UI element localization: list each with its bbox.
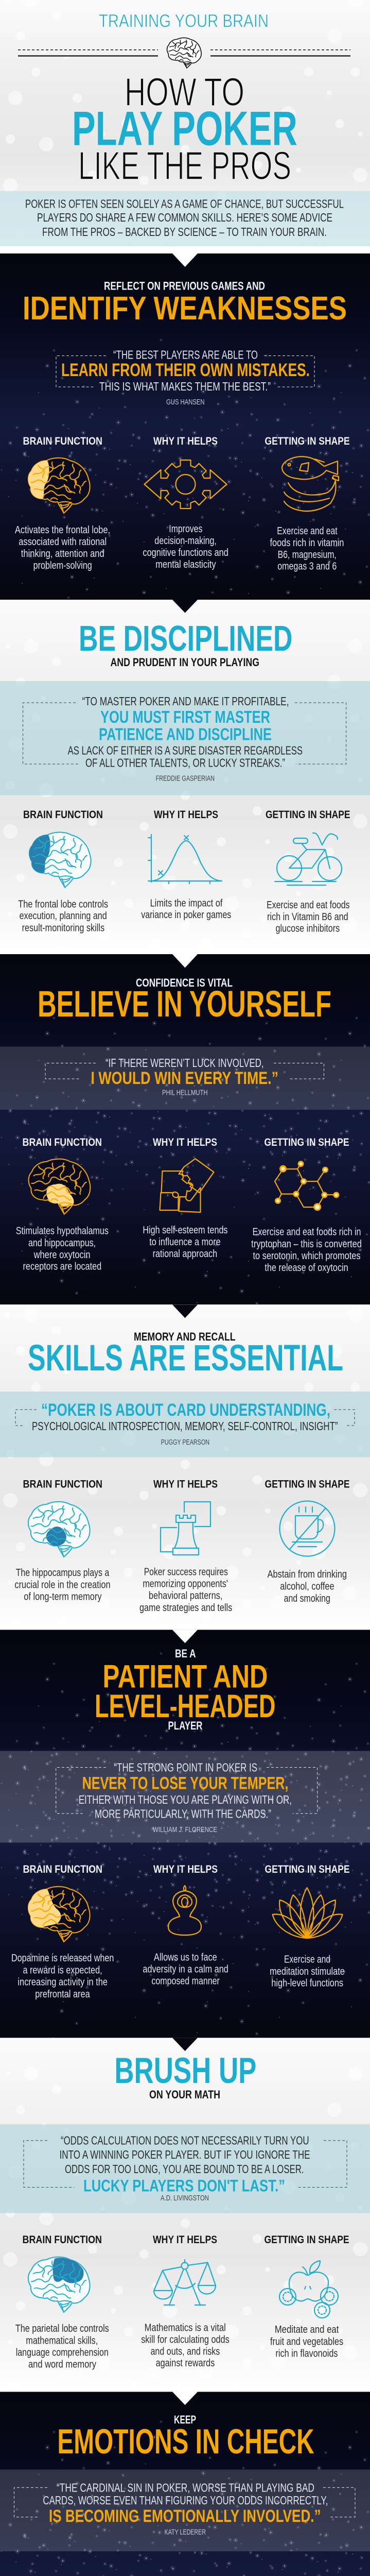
text block: high-level functions (271, 1977, 343, 1989)
heading: REFLECT ON PREVIOUS GAMES AND (104, 280, 265, 293)
quote (23, 694, 346, 783)
panel: patient and level-headed (0, 1630, 370, 2048)
text block: and word memory (28, 2359, 96, 2370)
icon: brain limbic region (29, 1159, 90, 1214)
panel: skills are essential (0, 1304, 370, 1630)
column: brain function (14, 1478, 111, 1602)
text block: execution, planning and (20, 910, 107, 922)
text block: increasing activity in the (17, 1976, 108, 1988)
icon: lotus (273, 1888, 343, 1938)
icon: molecule (275, 1161, 339, 1211)
column: why it helps (141, 808, 231, 921)
column: brain function (11, 1863, 114, 2000)
heading: BRUSH UP (114, 2050, 256, 2091)
text block: Improves (169, 523, 202, 535)
quote: A.D. LIVINGSTON (161, 2194, 209, 2202)
column: getting in shape (265, 435, 350, 572)
icon: no coffee (280, 1501, 334, 1556)
text block: B6, magnesium, (278, 549, 337, 561)
quote (56, 1760, 318, 1834)
panel: be disciplined (0, 600, 370, 960)
column: why it helps: WHY IT HELPS (153, 1863, 218, 1875)
text block: Meditate and eat (275, 2324, 339, 2335)
text block: receptors are located (23, 1261, 101, 1273)
text block: Dopamine is released when (11, 1953, 114, 1964)
quote: KATY LEDERER (165, 2528, 206, 2536)
text block: rich in flavonoids (276, 2348, 338, 2359)
text block: The hippocampus plays a (16, 1567, 110, 1579)
text block: crucial role in the creation (14, 1580, 111, 1591)
text block: adversity in a calm and (143, 1964, 228, 1975)
column: why it helps (141, 2233, 230, 2369)
text block: The frontal lobe controls (18, 899, 108, 910)
column: brain function: BRAIN FUNCTION (23, 435, 102, 447)
quote: EITHER WITH THOSE YOU ARE PLAYING WITH OR, (79, 1793, 292, 1806)
icon: bell curve chart (148, 835, 222, 884)
column: brain function (16, 1136, 109, 1273)
quote: “THE STRONG POINT IN POKER IS (114, 1760, 257, 1774)
text block: game strategies and tells (139, 1602, 232, 1614)
text block: omegas 3 and 6 (277, 561, 337, 572)
text block: Allows us to face (154, 1952, 217, 1963)
column: why it helps (143, 1136, 227, 1260)
heading: BE A (175, 1647, 196, 1660)
column: getting in shape (265, 1863, 350, 1989)
quote: WILLIAM J. FLORENCE (153, 1825, 217, 1834)
text block (141, 897, 231, 921)
icon: scales with compass (154, 2260, 216, 2305)
column: brain function: BRAIN FUNCTION (23, 1136, 102, 1148)
text block: behavioral patterns, (149, 1590, 222, 1601)
heading (95, 1647, 276, 1732)
quote band (0, 1047, 370, 1110)
text block: Activates the frontal lobe, (15, 524, 110, 536)
text block: foods rich in vitamin (270, 537, 344, 549)
column: brain function: BRAIN FUNCTION (23, 2233, 102, 2246)
arrow (172, 2038, 198, 2051)
text block (141, 2322, 230, 2369)
heading: AND PRUDENT IN YOUR PLAYING (110, 656, 259, 669)
text block: cognitive functions and (143, 547, 228, 558)
quote: GUS HANSEN (166, 398, 205, 406)
quote band (0, 1392, 370, 1457)
text block: and hippocampus, (28, 1238, 96, 1249)
icon: brain (167, 38, 201, 68)
column: getting in shape: GETTING IN SHAPE (265, 1478, 350, 1490)
text block: and outs, and risks (150, 2346, 220, 2358)
column: brain function (15, 435, 110, 571)
column: why it helps: WHY IT HELPS (154, 808, 218, 821)
text block: a reward is expected, (23, 1965, 102, 1976)
text block: and smoking (284, 1593, 330, 1604)
text block: of long-term memory (24, 1591, 102, 1602)
column: getting in shape: GETTING IN SHAPE (265, 2233, 349, 2246)
text block: associated with rational (19, 536, 107, 548)
heading: ON YOUR MATH (149, 2088, 220, 2101)
column: why it helps: WHY IT HELPS (153, 435, 218, 447)
text block: Mathematics is a vital (145, 2322, 226, 2333)
icon: chess rook (161, 1502, 210, 1555)
panel: brush up (0, 2038, 370, 2392)
quote: YOU MUST FIRST MASTER (100, 707, 270, 726)
text block: result-monitoring skills (22, 923, 104, 934)
panel: believe in yourself (0, 954, 370, 1318)
intro band (0, 191, 370, 246)
text block (268, 1569, 347, 1604)
divider lines (18, 49, 350, 50)
quote (24, 2133, 347, 2202)
quote (56, 348, 314, 406)
heading (79, 618, 292, 669)
quote: “THE BEST PLAYERS ARE ABLE TO (113, 348, 258, 362)
text block: High self-esteem tends (143, 1225, 227, 1236)
quote: FREDDIE GASPERIAN (156, 774, 215, 783)
text block (270, 526, 344, 572)
column: getting in shape: GETTING IN SHAPE (265, 1863, 350, 1875)
panel: title section (0, 0, 370, 314)
column: getting in shape (265, 1478, 350, 1604)
icon: brain prefrontal area (28, 1887, 90, 1942)
icon: fish and bananas (282, 456, 339, 511)
quote band (0, 2124, 370, 2213)
heading: LEVEL-HEADED (95, 1688, 276, 1724)
text block: prefrontal area (35, 1989, 90, 2000)
column: getting in shape (266, 808, 350, 934)
quote: OF ALL OTHER TALENTS, OR LUCKY STREAKS.” (85, 756, 285, 770)
quote: PUGGY PEARSON (161, 1438, 209, 1447)
text block (14, 1567, 111, 1602)
text block: problem-solving (33, 560, 92, 571)
quote: I WOULD WIN EVERY TIME.” (91, 1069, 278, 1088)
text block: language comprehension (16, 2347, 109, 2359)
heading: BE DISCIPLINED (79, 618, 292, 658)
text block (143, 1952, 228, 1987)
text block: Limits the impact of (150, 897, 223, 909)
title: LIKE THE PROS (78, 144, 291, 188)
text block (15, 2323, 109, 2370)
column: getting in shape (265, 2233, 349, 2359)
column: getting in shape: GETTING IN SHAPE (265, 1136, 349, 1148)
text block: skill for calculating odds (141, 2334, 230, 2346)
arrow (172, 1630, 198, 1643)
arrow (172, 600, 198, 613)
column: why it helps: WHY IT HELPS (153, 2233, 217, 2246)
icon: apple and berries (279, 2261, 338, 2318)
quote: MORE PARTICULARLY, WITH THE CARDS.” (95, 1807, 271, 1821)
text block (267, 900, 350, 934)
icon: yoga figure (168, 1886, 201, 1935)
text block (18, 899, 108, 934)
panel: emotions in check (0, 2392, 370, 2576)
text block (251, 1227, 362, 1274)
quote: NEVER TO LOSE YOUR TEMPER, (82, 1773, 288, 1793)
column: why it helps: WHY IT HELPS (153, 1478, 218, 1490)
heading (57, 2413, 314, 2461)
icon: gear with arrows (144, 460, 226, 509)
quote band (0, 681, 370, 795)
text block: the release of oxytocin (265, 1262, 348, 1274)
text block: Exercise and eat (277, 526, 338, 537)
text block: rational approach (153, 1248, 217, 1260)
column: brain function: BRAIN FUNCTION (23, 1478, 102, 1490)
text block: thinking, attention and (21, 548, 104, 560)
text block: Exercise and (284, 1954, 330, 1965)
text block (15, 524, 110, 571)
overline: training your brain: TRAINING YOUR BRAIN (99, 11, 269, 31)
column: brain function (15, 2233, 109, 2370)
quote (45, 1056, 324, 1097)
text block: Stimulates hypothalamus (16, 1226, 109, 1237)
arrow (172, 1304, 198, 1318)
heading: PLAYER (168, 1719, 203, 1732)
column: brain function: BRAIN FUNCTION (23, 1863, 102, 1875)
icon: puzzle (160, 1159, 214, 1212)
icon: bicycle (275, 833, 342, 885)
arrow (172, 2392, 198, 2405)
text block: variance in poker games (141, 909, 231, 921)
column: brain function (18, 808, 108, 934)
text block (143, 1225, 227, 1260)
text block: Abstain from drinking (268, 1569, 347, 1580)
text block: rich in Vitamin B6 and (267, 911, 348, 923)
text block: memorizing opponents' (143, 1579, 228, 1590)
icon: brain frontal lobe (29, 832, 91, 888)
text block: mental elasticity (155, 559, 216, 570)
panel: identify weaknesses (0, 253, 370, 650)
column: why it helps (143, 435, 228, 570)
heading: PATIENT AND (103, 1659, 268, 1695)
text block: meditation stimulate (270, 1966, 345, 1977)
column: brain function: BRAIN FUNCTION (23, 808, 103, 821)
text block (270, 2324, 343, 2359)
heading: CONFIDENCE IS VITAL (136, 976, 233, 989)
text block: glucose inhibitors (276, 923, 340, 934)
quote: “IF THERE WEREN’T LUCK INVOLVED, (105, 1056, 264, 1070)
text block: Poker success requires (144, 1567, 228, 1578)
quote band (0, 2469, 370, 2551)
heading: KEEP (174, 2413, 196, 2426)
text block: Exercise and eat foods (267, 900, 350, 911)
column: why it helps (139, 1478, 232, 1614)
arrow (172, 954, 198, 968)
quote (14, 2481, 355, 2536)
text block (11, 1953, 114, 2000)
quote: PATIENCE AND DISCIPLINE (99, 725, 272, 744)
quote (15, 1400, 355, 1447)
text block: alcohol, coffee (280, 1581, 334, 1592)
text block: against rewards (156, 2358, 215, 2369)
quote: LUCKY PLAYERS DON'T LAST.” (83, 2176, 285, 2195)
text block: The parietal lobe controls (15, 2323, 109, 2334)
title (72, 71, 297, 188)
icon: brain frontal lobe (28, 458, 90, 513)
column: getting in shape (251, 1136, 362, 1274)
heading: MEMORY AND RECALL (134, 1330, 236, 1343)
column: getting in shape: GETTING IN SHAPE (265, 435, 350, 447)
text block (139, 1567, 232, 1614)
text block (16, 1226, 109, 1273)
text block: mathematical skills, (26, 2335, 98, 2347)
text block (270, 1954, 345, 1989)
arrow (172, 253, 198, 267)
text block: composed manner (151, 1976, 220, 1987)
text block: to influence a more (149, 1236, 221, 1248)
icon: brain hippocampus (28, 1502, 90, 1557)
title: HOW TO (125, 71, 244, 114)
quote: “TO MASTER POKER AND MAKE IT PROFITABLE, (82, 694, 289, 708)
column: why it helps: WHY IT HELPS (153, 1136, 217, 1148)
quote: THIS IS WHAT MAKES THEM THE BEST.” (99, 380, 271, 393)
quote band (0, 1751, 370, 1842)
text block: decision-making, (154, 535, 217, 547)
text block: where oxytocin (33, 1249, 91, 1261)
text block: fruit and vegetables (270, 2336, 343, 2347)
quote: PHIL HELLMUTH (162, 1089, 208, 1097)
column: getting in shape: GETTING IN SHAPE (266, 808, 350, 821)
column: why it helps (143, 1863, 228, 1987)
icon: brain parietal lobe (28, 2257, 90, 2312)
text block (143, 523, 228, 570)
heading (114, 2050, 256, 2101)
